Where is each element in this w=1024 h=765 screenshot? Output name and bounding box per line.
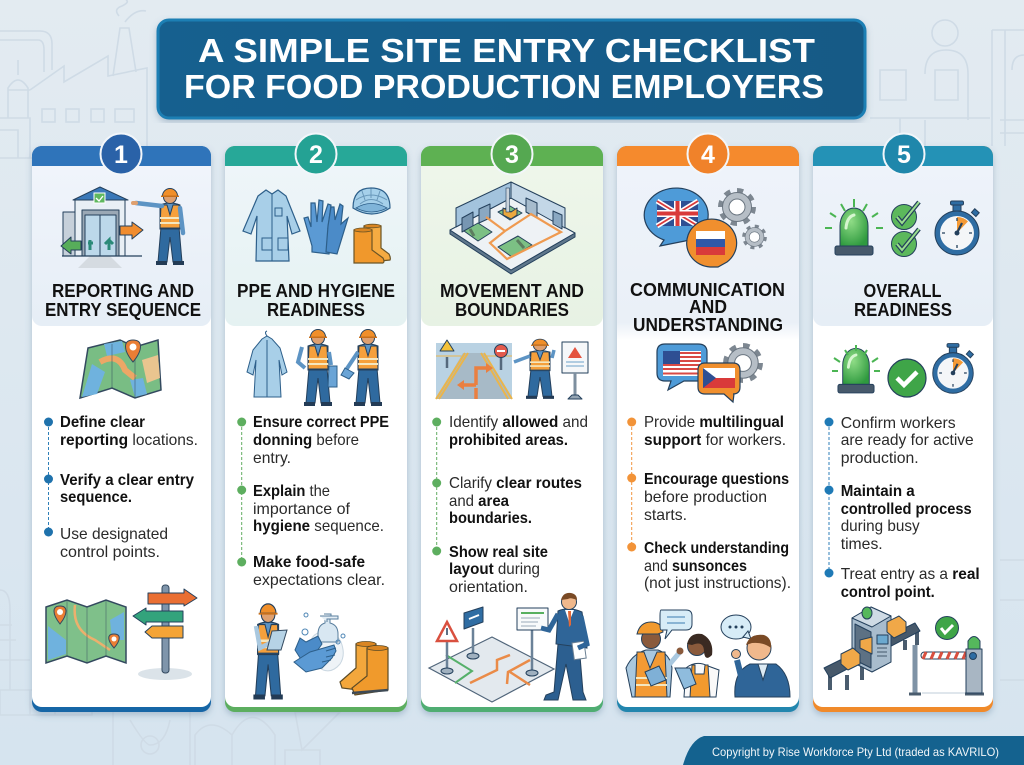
heading: BOUNDARIES xyxy=(455,300,569,320)
heading: MOVEMENT AND xyxy=(440,281,584,301)
checklist text with timeline: prohibited areas. xyxy=(449,432,568,449)
icon: team conversation xyxy=(626,610,790,697)
checklist text with timeline: donning before xyxy=(253,432,359,449)
icon: site map floor with signs and manager xyxy=(429,593,587,702)
checklist text with timeline: and area xyxy=(449,493,509,510)
heading xyxy=(854,281,952,320)
number badge 1: 1 xyxy=(114,141,128,169)
checklist text with timeline xyxy=(237,414,389,589)
checklist text with timeline: (not just instructions). xyxy=(644,575,791,592)
number badge 1 xyxy=(100,134,142,174)
heading: UNDERSTANDING xyxy=(633,315,783,335)
checklist text with timeline: Maintain a xyxy=(841,483,915,500)
checklist text with timeline: layout during xyxy=(449,561,540,578)
checklist text with timeline: sequence. xyxy=(60,489,132,506)
checklist text with timeline xyxy=(44,414,198,561)
icon: conveyor scanner with boxes xyxy=(824,607,920,690)
icon: beacon, check circle, stopwatch xyxy=(832,344,973,397)
icon: isometric site floor plan xyxy=(450,182,575,274)
icon: folded map with pin xyxy=(80,340,161,398)
checklist text with timeline: during busy xyxy=(841,518,920,535)
icon: signpost with arrows xyxy=(133,585,197,680)
heading: PPE AND HYGIENE xyxy=(237,281,395,301)
heading xyxy=(237,281,395,320)
heading: AND xyxy=(689,297,727,317)
number badge 4 xyxy=(688,134,728,174)
checklist text with timeline: Explain the xyxy=(253,483,330,500)
checklist text with timeline: Check understanding xyxy=(644,540,789,557)
icon: hand washing with soap pump xyxy=(294,613,345,672)
checklist text with timeline: controlled process xyxy=(841,501,972,518)
checklist text with timeline xyxy=(432,414,588,596)
heading: OVERALL xyxy=(864,281,942,301)
checklist text with timeline: orientation. xyxy=(449,579,528,596)
panel: card 1 reporting and entry sequence xyxy=(32,134,211,712)
panel: card 4 communication and understanding xyxy=(617,134,799,712)
number badge 5 xyxy=(884,134,924,174)
icon: gown and workers donning ppe xyxy=(247,330,382,406)
checklist text with timeline: are ready for active xyxy=(841,432,974,449)
icon: us and czech flag bubbles with gear xyxy=(657,344,760,402)
checklist text with timeline: boundaries. xyxy=(449,510,532,527)
icon: lab coat, gloves, hair net, boots xyxy=(243,188,390,263)
checklist text with timeline: Treat entry as a real xyxy=(841,566,980,583)
checklist text with timeline: before production xyxy=(644,489,767,506)
checklist text with timeline: entry. xyxy=(253,450,291,467)
number badge 5: 5 xyxy=(897,141,911,169)
checklist text with timeline: Identify allowed and xyxy=(449,414,588,431)
checklist text with timeline: times. xyxy=(841,536,883,553)
heading xyxy=(630,280,785,335)
icon: barrier gate with check xyxy=(909,616,984,694)
icon: speech bubbles with flags and gears xyxy=(644,188,765,267)
checklist text with timeline: support for workers. xyxy=(644,432,786,449)
title banner xyxy=(158,20,865,118)
icon: green beacon, checks and stopwatch xyxy=(825,199,979,256)
checklist text with timeline: production. xyxy=(841,450,919,467)
panel: card 3 movement and boundaries xyxy=(421,134,603,712)
copyright bar: Copyright by Rise Workforce Pty Ltd (traded as KAVRILO) xyxy=(712,745,999,759)
number badge 2 xyxy=(296,134,336,174)
checklist text with timeline xyxy=(627,414,791,592)
icon: map with pins xyxy=(46,600,126,663)
heading: REPORTING AND xyxy=(52,281,194,301)
number badge 2: 2 xyxy=(309,141,323,169)
title text: A SIMPLE SITE ENTRY CHECKLIST xyxy=(198,32,815,69)
title text xyxy=(184,32,824,105)
heading: READINESS xyxy=(267,300,365,320)
heading: READINESS xyxy=(854,300,952,320)
number badge 3: 3 xyxy=(505,141,519,169)
checklist text with timeline: expectations clear. xyxy=(253,572,385,589)
checklist text with timeline: and sunsonces xyxy=(644,558,747,575)
checklist text with timeline: Provide multilingual xyxy=(644,414,784,431)
icon: worker with tablet xyxy=(253,604,287,700)
checklist text with timeline: reporting locations. xyxy=(60,432,198,449)
number badge 3 xyxy=(492,134,532,174)
checklist text with timeline xyxy=(824,415,980,601)
checklist text with timeline: control point. xyxy=(841,584,935,601)
panel: card 2 ppe and hygiene readiness xyxy=(225,134,407,712)
heading xyxy=(440,281,584,320)
heading xyxy=(45,281,201,320)
icon: road with signs, worker and warning board xyxy=(436,339,588,399)
checklist text with timeline: Ensure correct PPE xyxy=(253,414,389,431)
checklist text with timeline: Use designated xyxy=(60,526,168,543)
checklist text with timeline: Verify a clear entry xyxy=(60,472,194,489)
icon: rubber boots xyxy=(340,642,388,695)
checklist text with timeline: Define clear xyxy=(60,414,145,431)
title text: FOR FOOD PRODUCTION EMPLOYERS xyxy=(184,68,824,105)
panel: card 5 overall readiness xyxy=(813,134,993,712)
checklist text with timeline: importance of xyxy=(253,501,351,518)
copyright bar xyxy=(683,736,1024,765)
number badge 4: 4 xyxy=(701,141,715,169)
checklist text with timeline: control points. xyxy=(60,544,160,561)
checklist text with timeline: Show real site xyxy=(449,544,548,561)
checklist text with timeline: Confirm workers xyxy=(841,415,956,432)
icon: building entrance and worker pointing xyxy=(61,187,184,268)
checklist text with timeline: Encourage questions xyxy=(644,471,789,488)
heading: ENTRY SEQUENCE xyxy=(45,300,201,320)
checklist text with timeline: starts. xyxy=(644,507,687,524)
heading: COMMUNICATION xyxy=(630,280,785,300)
checklist text with timeline: hygiene sequence. xyxy=(253,518,384,535)
checklist text with timeline: Make food-safe xyxy=(253,554,365,571)
checklist text with timeline: Clarify clear routes xyxy=(449,475,582,492)
